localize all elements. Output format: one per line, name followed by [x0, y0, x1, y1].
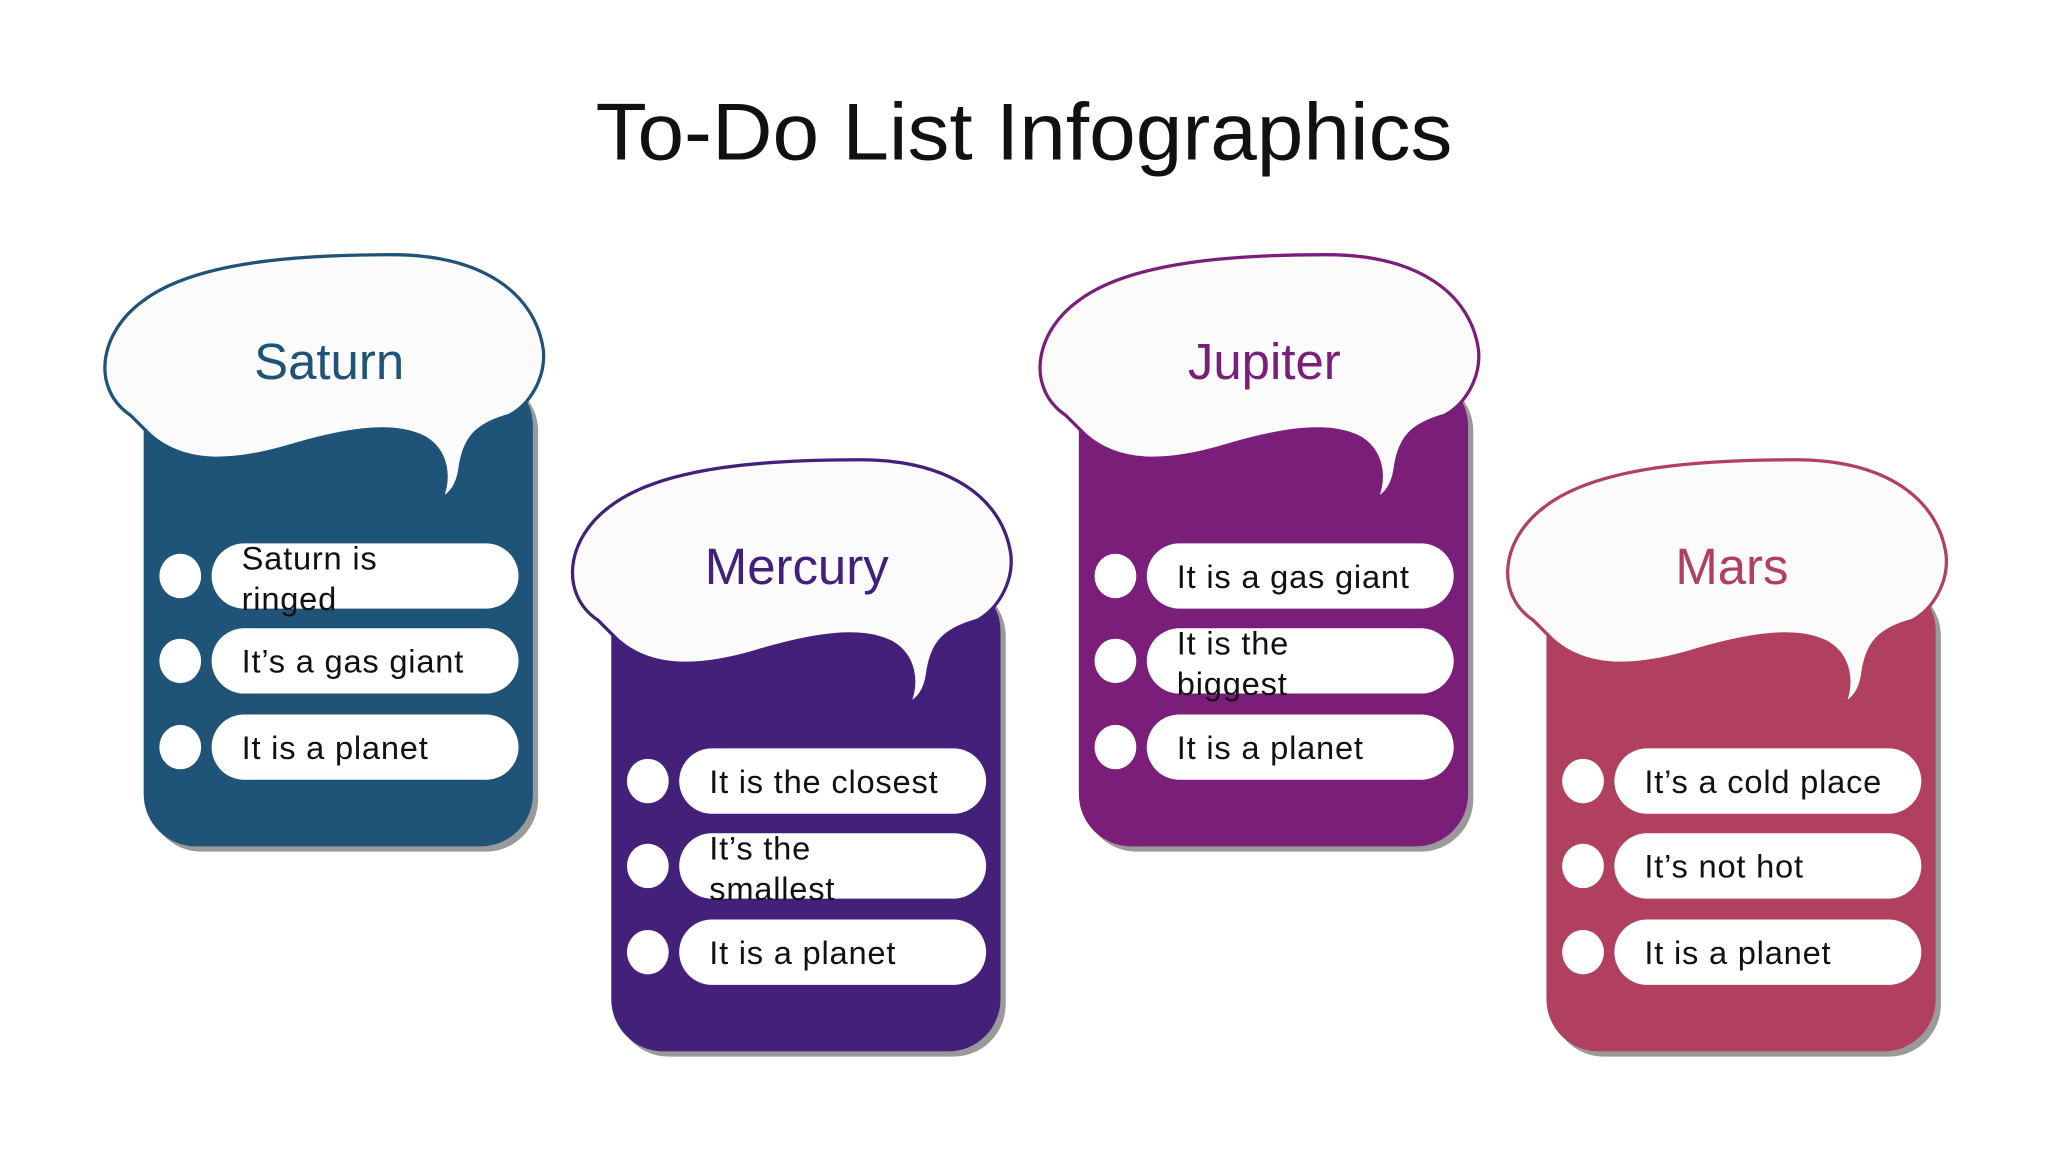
panel: Mercury — [572, 460, 1011, 1057]
bubble: Jupiter: Jupiter — [1188, 333, 1341, 390]
bubble: Jupiter — [1040, 255, 1479, 499]
item: It is a planet — [627, 920, 986, 985]
bubble: Mars — [1508, 460, 1946, 704]
bubble: Saturn: Saturn — [254, 333, 404, 390]
item: It's a gas giant: It’s a gas giant — [242, 643, 464, 680]
item: It's not hot — [1562, 833, 1921, 899]
item: It's the smallest: It’s the — [709, 829, 811, 866]
item: Saturn is ringed — [159, 539, 519, 617]
item: It's the smallest — [627, 829, 986, 907]
item: It's not hot: It’s not hot — [1644, 848, 1804, 885]
item: It is a planet: It is a planet — [1177, 729, 1364, 766]
item: It is a planet — [159, 714, 519, 780]
title: To-Do List Infographics — [596, 87, 1452, 177]
bubble: Mercury: Mercury — [705, 538, 889, 595]
item: It is the closest — [627, 748, 986, 814]
item: It's a gas giant — [159, 628, 519, 694]
panel: Saturn — [105, 255, 544, 852]
item: It is the biggest — [1095, 624, 1454, 702]
bubble: Saturn — [105, 255, 544, 499]
item: It is a planet: It is a planet — [1644, 934, 1831, 971]
item: It is the biggest: It is the — [1177, 624, 1289, 661]
item: It is a planet — [1562, 920, 1921, 985]
item: Saturn is ringed: ringed — [242, 580, 337, 617]
item: It is a planet: It is a planet — [709, 934, 896, 971]
item: It is a gas giant: It is a gas giant — [1177, 558, 1410, 595]
item: It is a planet: It is a planet — [242, 729, 429, 766]
item: It is a planet — [1095, 714, 1454, 780]
item: It is a gas giant — [1095, 543, 1454, 609]
item: It's a cold place: It’s a cold place — [1644, 763, 1882, 800]
panel: Jupiter — [1040, 255, 1479, 852]
panel: Mars — [1508, 460, 1946, 1057]
item: It's a cold place — [1562, 748, 1921, 814]
bubble: Mars: Mars — [1675, 538, 1789, 595]
bubble: Mercury — [572, 460, 1011, 704]
item: Saturn is ringed: Saturn is — [242, 539, 378, 576]
item: It is the closest: It is the closest — [709, 763, 938, 800]
item: It's the smallest: smallest — [709, 870, 835, 907]
item: It is the biggest: biggest — [1177, 665, 1288, 702]
